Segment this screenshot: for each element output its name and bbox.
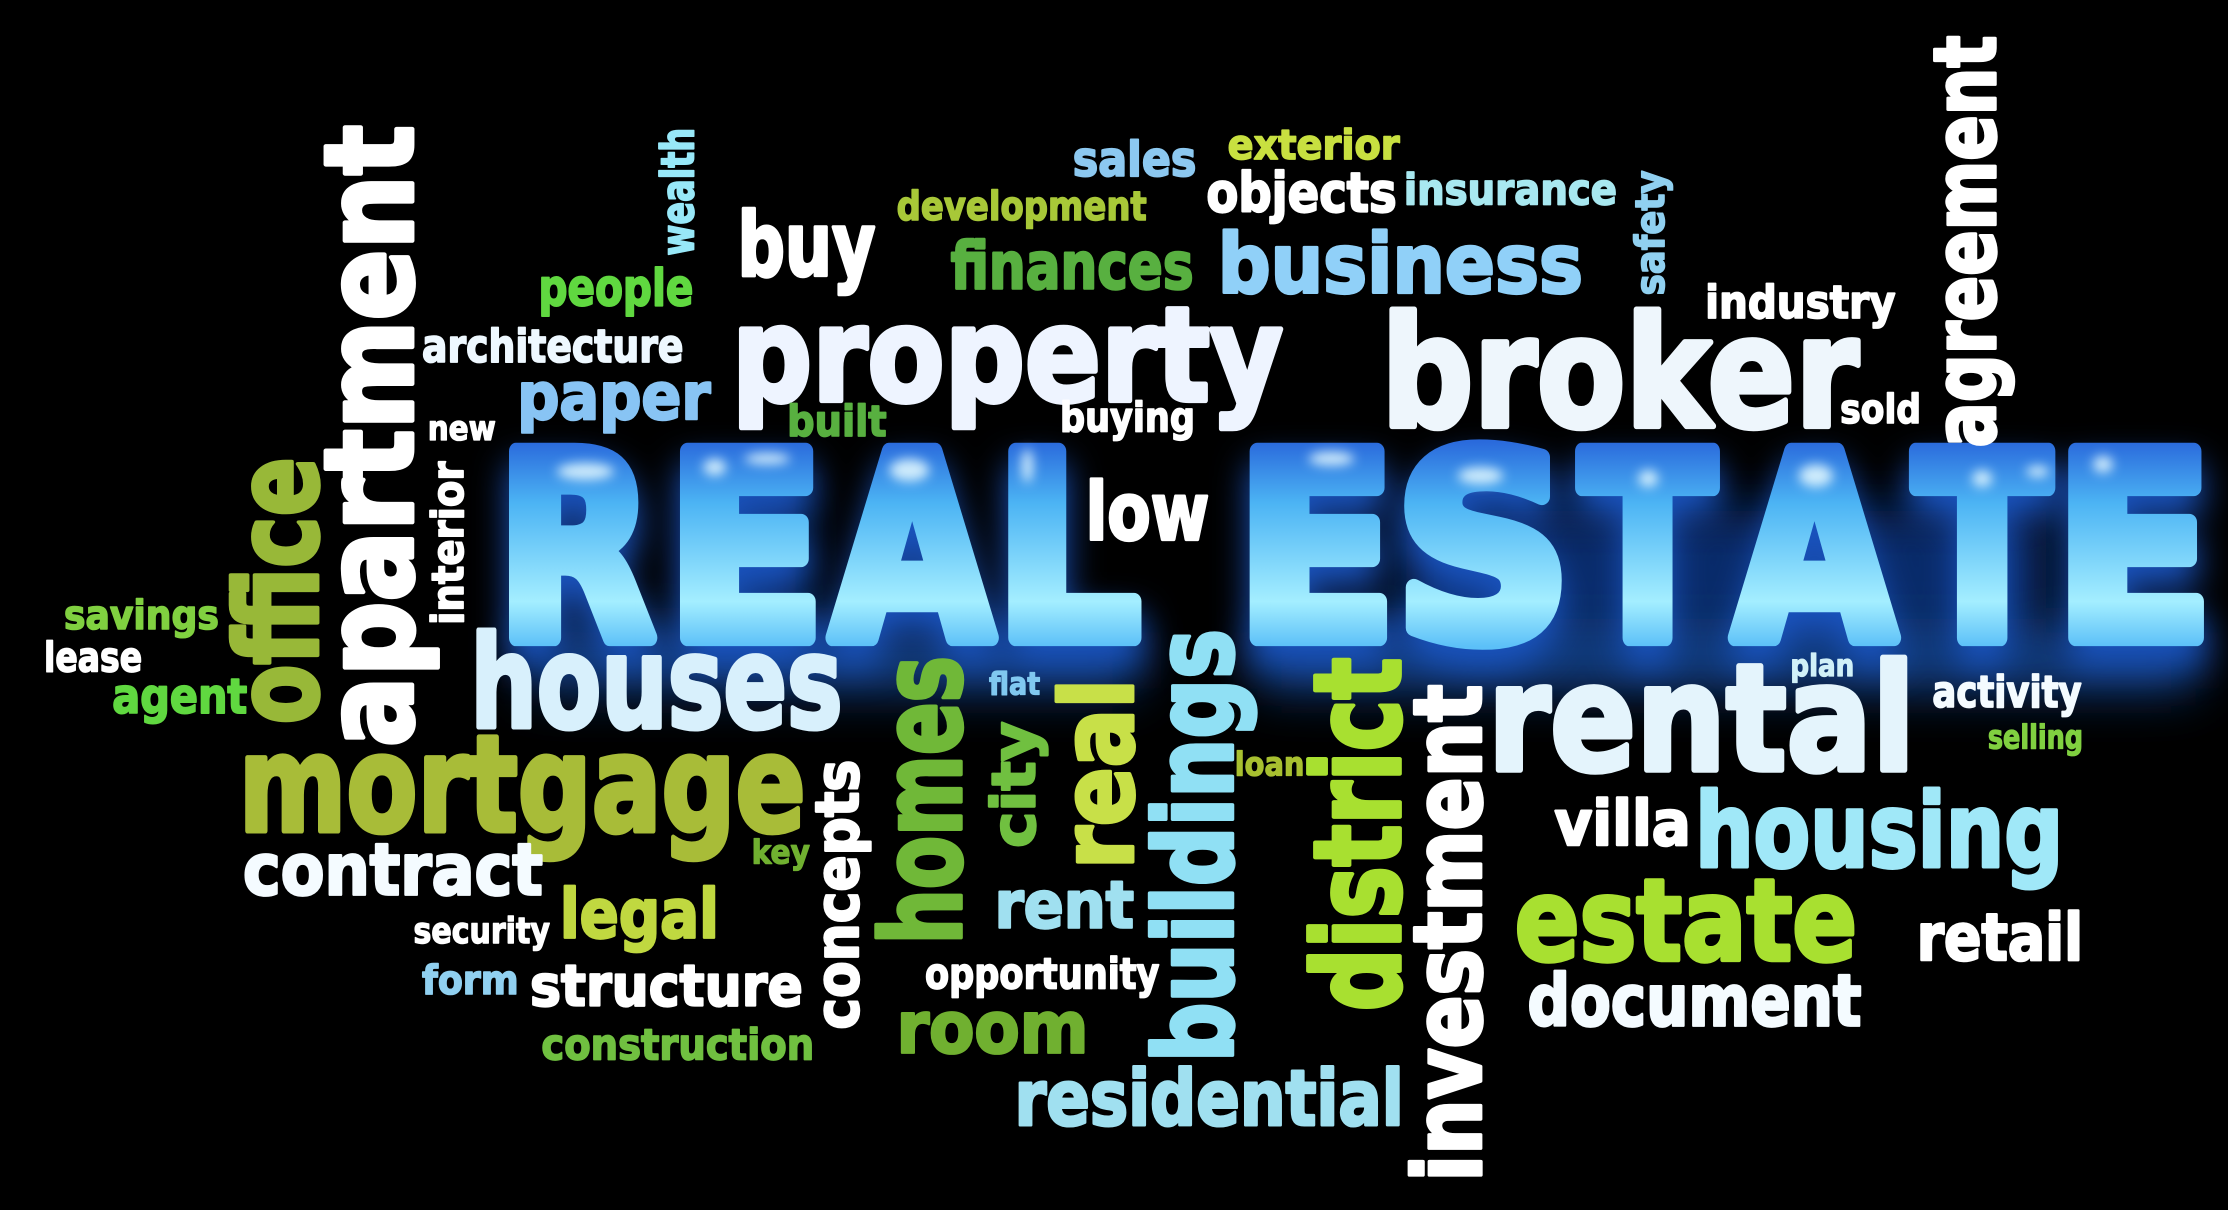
word: new: new: [428, 409, 496, 449]
word: room: room: [897, 986, 1088, 1069]
title: REAL ESTATE: R: [497, 402, 655, 699]
word: selling: selling: [1988, 718, 2083, 756]
word: document: document: [1527, 959, 1861, 1042]
word: sales: sales: [1073, 132, 1196, 188]
word: flat: flat: [989, 666, 1040, 702]
word: insurance: insurance: [1404, 166, 1617, 216]
word: agent: agent: [112, 669, 247, 725]
title: REAL ESTATE: E: [666, 402, 825, 699]
word: opportunity: opportunity: [925, 949, 1159, 999]
word: city: city: [980, 721, 1049, 848]
word: low: low: [1086, 466, 1209, 559]
word: rental: rental: [1488, 633, 1915, 805]
word: district: district: [1290, 658, 1429, 1011]
title: REAL ESTATE: [497, 402, 2213, 699]
title: REAL ESTATE: E: [1236, 402, 1396, 699]
word: real: real: [1041, 679, 1156, 869]
word: apartment: apartment: [299, 125, 441, 747]
word: retail: retail: [1917, 900, 2083, 976]
word: concepts: concepts: [804, 760, 873, 1030]
word: legal: legal: [560, 875, 719, 954]
word: buying: buying: [1060, 394, 1195, 442]
word: property: property: [732, 280, 1283, 431]
word: interior: interior: [423, 461, 474, 625]
word: investment: investment: [1395, 685, 1504, 1182]
word: estate: estate: [1515, 855, 1857, 987]
word: security: security: [413, 911, 550, 952]
word: architecture: architecture: [422, 320, 683, 373]
title: REAL ESTATE: T: [1915, 402, 2050, 699]
word: houses: houses: [470, 609, 843, 758]
title: REAL ESTATE: S: [1395, 402, 1572, 699]
word: people: people: [539, 259, 693, 318]
title: REAL ESTATE: A: [1734, 402, 1895, 699]
word: form: form: [422, 958, 519, 1004]
word: savings: savings: [64, 593, 219, 639]
word: business: business: [1218, 218, 1583, 313]
title: REAL ESTATE: A: [831, 402, 993, 699]
word: key: key: [752, 833, 810, 871]
word: finances: finances: [951, 228, 1194, 304]
word: rent: rent: [995, 867, 1134, 943]
word: built: built: [787, 397, 887, 447]
word: development: development: [897, 184, 1147, 230]
glow beneath title: [526, 490, 2195, 689]
word: homes: homes: [859, 656, 988, 944]
word: broker: broker: [1381, 285, 1859, 463]
word: exterior: exterior: [1228, 121, 1400, 169]
word: industry: industry: [1705, 276, 1896, 329]
word: objects: objects: [1206, 162, 1397, 225]
word: residential: residential: [1015, 1055, 1404, 1144]
word: activity: activity: [1932, 667, 2082, 718]
word: wealth: wealth: [651, 128, 704, 256]
word: paper: paper: [517, 359, 711, 435]
word: lease: lease: [44, 634, 142, 682]
word: sold: sold: [1840, 387, 1921, 433]
word: buildings: buildings: [1133, 629, 1258, 1062]
word: villa: villa: [1554, 787, 1691, 860]
word: structure: structure: [530, 954, 803, 1019]
word: safety: safety: [1628, 170, 1674, 295]
word: mortgage: mortgage: [239, 708, 806, 863]
word: housing: housing: [1695, 772, 2063, 891]
word: buy: buy: [737, 194, 875, 297]
title: REAL ESTATE: L: [995, 402, 1140, 699]
word: plan: plan: [1790, 649, 1854, 684]
word: contract: contract: [243, 829, 543, 912]
word: construction: construction: [541, 1020, 814, 1070]
title: REAL ESTATE: T: [1581, 402, 1714, 699]
title: REAL ESTATE: E: [2055, 402, 2213, 699]
word: office: office: [212, 457, 344, 724]
word: loan: loan: [1235, 745, 1304, 783]
